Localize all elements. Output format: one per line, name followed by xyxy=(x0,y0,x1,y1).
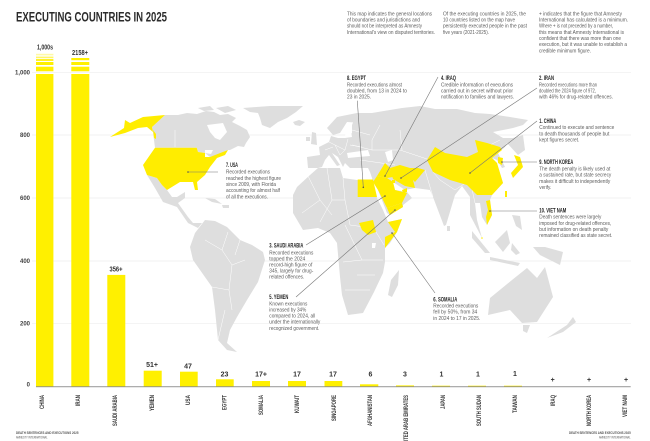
callout: Saudi Arabia: related offences. xyxy=(269,275,304,281)
callout: Viet Nam: but information on death penalty xyxy=(539,227,609,233)
text block: plus sign explanation: execution, but it was unable to establish a xyxy=(539,42,627,48)
callout: Iraq xyxy=(441,76,514,101)
source: left footer: AMNESTY INTERNATIONAL xyxy=(16,436,48,440)
country: South Sudan xyxy=(359,220,376,235)
callout: Iraq: carried out in secret without prior xyxy=(441,88,513,94)
value labels: 47 xyxy=(184,364,192,370)
arrow: Iraq xyxy=(384,77,438,177)
callout: Iran: 2. IRAN xyxy=(539,76,554,82)
callout: Yemen: compared to 2024, all xyxy=(269,314,315,320)
country: Iran xyxy=(390,165,415,188)
country labels: SAUDI ARABIA xyxy=(113,395,119,426)
country: Saudi Arabia xyxy=(373,176,407,208)
callout: North Korea: a sustained rate, but state secrecy xyxy=(539,173,612,179)
country labels: USA xyxy=(186,394,192,405)
arrow: Iran xyxy=(400,88,537,179)
bar: USA xyxy=(180,372,198,386)
source: left footer: DEATH SENTENCES AND EXECUTIONS 2025 xyxy=(16,431,78,435)
y axis labels xyxy=(15,71,31,388)
y axis labels: 400 xyxy=(20,259,31,265)
country: Afghanistan xyxy=(407,168,425,182)
callout: Viet Nam: remained classified as state secret. xyxy=(539,233,612,239)
arrow: China xyxy=(469,121,537,174)
country: USA xyxy=(110,115,228,190)
text block: map disclaimer: This map indicates the general locations xyxy=(347,11,432,17)
borders xyxy=(175,125,500,340)
land: Africa xyxy=(293,168,402,315)
text block: map disclaimer: should not be interpreted as Amnesty xyxy=(347,24,422,30)
source: right footer: AMNESTY INTERNATIONAL xyxy=(599,436,630,440)
bar: Egypt xyxy=(216,379,234,386)
callout: USA: of all the executions. xyxy=(226,194,268,200)
value labels: 356+ xyxy=(110,266,122,274)
callout: Saudi Arabia: 3. SAUDI ARABIA xyxy=(269,243,304,249)
callout: Iraq: notification to families and lawyers. xyxy=(441,95,514,101)
value labels: 17 xyxy=(329,372,337,378)
bar: United Arab Emirates xyxy=(396,385,414,386)
bar: Somalia xyxy=(252,381,270,386)
country labels: JAPAN xyxy=(441,395,447,409)
land: islands xyxy=(198,106,576,338)
country labels: KUWAIT xyxy=(295,395,301,413)
callout: USA: 7. USA xyxy=(226,163,238,169)
text block: map disclaimer: International's view on disputed territories. xyxy=(347,30,435,36)
callout: Yemen: Known executions xyxy=(269,302,308,308)
callout: Egypt xyxy=(347,76,407,101)
text block: plus sign explanation: confident that there was more than one xyxy=(539,36,621,42)
callout: North Korea: makes it difficult to independently xyxy=(539,179,611,185)
callout: Saudi Arabia xyxy=(269,243,314,281)
callout: North Korea: 9. NORTH KOREA xyxy=(539,160,574,166)
baseline xyxy=(36,385,631,388)
text block: plus sign explanation xyxy=(539,11,628,54)
callout: USA: reached the highest figure xyxy=(226,176,281,182)
value labels: + xyxy=(551,377,555,384)
countries: Kuwait, UAE and Singapore xyxy=(392,180,483,239)
y axis labels: 200 xyxy=(20,322,31,328)
bar: Iran xyxy=(71,58,89,386)
value labels: 17+ xyxy=(255,372,267,378)
land: Greenland xyxy=(243,106,303,128)
callout: Viet Nam: 10. VIET NAM xyxy=(539,208,566,214)
country labels: CHINA xyxy=(40,395,46,409)
country labels: TAIWAN xyxy=(513,395,519,413)
country labels: IRAQ xyxy=(551,395,557,406)
bar: Singapore xyxy=(324,381,342,386)
text block: executing countries note: persistently executed people in the past xyxy=(443,24,528,30)
callout: Iraq: 4. IRAQ xyxy=(441,76,456,82)
country labels: NORTH KOREA xyxy=(587,395,593,426)
bar: Japan xyxy=(432,385,450,388)
callout: Egypt: Recorded executions almost xyxy=(347,82,402,88)
callout: Iran: Recorded executions more than xyxy=(539,82,597,88)
country: China xyxy=(427,140,503,195)
bar: Saudi Arabia xyxy=(107,275,125,386)
country labels: SINGAPORE xyxy=(332,395,338,421)
arrow: North Korea xyxy=(501,161,537,163)
text block: map disclaimer xyxy=(347,11,435,36)
callout: China: Continued to execute and sentence xyxy=(539,125,614,131)
value labels: 6 xyxy=(369,372,373,378)
callout: Egypt: 8. EGYPT xyxy=(347,76,366,82)
callout: Egypt: doubled, from 13 in 2024 to xyxy=(347,88,407,94)
country labels: IRAN xyxy=(76,395,82,406)
country: Iraq xyxy=(377,163,393,178)
y axis labels: 800 xyxy=(20,133,31,139)
text block: executing countries note: 10 countries listed on the map have xyxy=(443,18,515,24)
text block: plus sign explanation: this means that Amnesty International is xyxy=(539,30,624,36)
value labels: 23 xyxy=(221,372,228,378)
callout: China: to death thousands of people but xyxy=(539,131,610,137)
source: right footer: DEATH SENTENCES AND EXECUTIONS 2025 xyxy=(569,431,631,435)
country labels: EGYPT xyxy=(222,395,228,410)
callout: Saudi Arabia: topped the 2024 xyxy=(269,256,305,262)
value labels: + xyxy=(624,377,628,384)
bar: Afghanistan xyxy=(360,384,378,386)
source: left footer xyxy=(16,431,78,440)
country: Taiwan xyxy=(505,191,507,197)
country: North Korea xyxy=(498,157,503,165)
arrow: Somalia xyxy=(391,232,435,293)
arrow: Saudi Arabia xyxy=(306,195,386,245)
value labels: 1 xyxy=(440,372,444,378)
callout: USA xyxy=(226,163,281,200)
callout: Yemen: 5. YEMEN xyxy=(269,295,288,301)
country: Viet Nam xyxy=(486,200,492,225)
source: right footer xyxy=(569,431,631,440)
country: Japan xyxy=(511,155,523,178)
value labels: 3 xyxy=(403,372,407,378)
text block: plus sign explanation: International has calculated is a minimum. xyxy=(539,18,628,24)
value labels xyxy=(37,44,628,384)
country: Somalia xyxy=(385,219,402,248)
callout: Saudi Arabia: record-high figure of xyxy=(269,262,313,268)
value labels: 1,000s xyxy=(37,44,53,52)
callout: Egypt: 23 in 2025. xyxy=(347,95,371,101)
bar: Kuwait xyxy=(288,381,306,386)
land: Eurasia xyxy=(307,106,528,238)
callout: Yemen xyxy=(269,295,321,332)
arrow: Viet Nam xyxy=(489,210,537,212)
value labels: 1 xyxy=(476,372,480,378)
callout: Saudi Arabia: Recorded executions xyxy=(269,250,314,256)
callout: North Korea xyxy=(539,160,612,191)
callout: Iran xyxy=(539,76,613,101)
bar: Yemen xyxy=(144,371,162,386)
title: EXECUTING COUNTRIES IN 2025 xyxy=(16,10,167,24)
arrow: Egypt xyxy=(357,101,364,188)
world map xyxy=(110,106,576,352)
land: Mexico and Central America xyxy=(147,175,202,228)
callout: North Korea: The death penalty is likely used at xyxy=(539,166,611,172)
bar: Taiwan xyxy=(504,385,522,388)
country labels: VIET NAM xyxy=(623,395,629,417)
bar: China xyxy=(36,54,53,387)
text block: executing countries note: five years (2021-2025). xyxy=(443,30,489,36)
callout: China: 1. CHINA xyxy=(539,119,557,125)
text block: executing countries note: Of the executing countries in 2025, the xyxy=(443,11,526,17)
country labels: AFGHANISTAN xyxy=(368,395,374,426)
callout: USA: Recorded executions xyxy=(226,170,270,176)
country labels: SOMALIA xyxy=(259,395,265,415)
callout: Yemen: under the internationally xyxy=(269,320,321,326)
inland seas and lakes xyxy=(205,123,393,248)
country labels: YEMEN xyxy=(150,395,156,411)
country: Egypt xyxy=(358,180,377,197)
callout: Yemen: recognized government. xyxy=(269,326,319,332)
callout: Somalia: fell by 50%, from 34 xyxy=(433,310,477,316)
callout: Yemen: increased by 34% xyxy=(269,308,307,314)
callout: Saudi Arabia: 345, largely for drug- xyxy=(269,268,314,274)
land: Scandinavia xyxy=(327,113,362,135)
value labels: + xyxy=(587,377,591,384)
text block: map disclaimer: of boundaries and jurisdictions and xyxy=(347,18,420,24)
y axis labels: 1,000 xyxy=(15,71,31,77)
callout: Somalia xyxy=(433,297,480,322)
callout: China xyxy=(539,119,614,143)
y axis labels: 600 xyxy=(20,196,31,202)
arrow: USA xyxy=(187,171,218,173)
callout: North Korea: verify. xyxy=(539,185,551,191)
land: South America xyxy=(190,220,265,352)
callout: Viet Nam: Death sentences were largely xyxy=(539,215,602,221)
callout: Viet Nam xyxy=(539,208,612,239)
value labels: 51+ xyxy=(146,362,158,369)
callout: USA: since 2009, with Florida xyxy=(226,182,276,188)
callout: Somalia: 6. SOMALIA xyxy=(433,297,458,303)
callout: Iraq: Credible information of executions xyxy=(441,82,513,88)
callout: Iran: with 46% for drug-related offences. xyxy=(539,95,613,101)
callout: Somalia: Recorded executions xyxy=(433,304,479,310)
land: Canada xyxy=(152,111,250,157)
country labels xyxy=(40,394,629,441)
y axis labels: 0 xyxy=(27,382,31,388)
text block: plus sign explanation: Where + is not preceded by a number, xyxy=(539,24,613,30)
text block: plus sign explanation: credible minimum figure. xyxy=(539,48,591,54)
callout: USA: accounting for almost half xyxy=(226,188,280,194)
text block: plus sign explanation: + indicates that the figure that Amnesty xyxy=(539,11,622,17)
callout: Iran: doubled the 2024 figure of 972, xyxy=(539,88,596,94)
country: Yemen xyxy=(387,203,403,215)
callout: China: kept figures secret. xyxy=(539,137,579,143)
leader lines xyxy=(187,77,537,297)
value labels: 2158+ xyxy=(72,50,88,57)
value labels: 17 xyxy=(293,372,301,378)
value labels: 1 xyxy=(513,371,517,378)
arrow: Yemen xyxy=(296,209,396,297)
bar: South Sudan xyxy=(468,385,486,388)
text block: executing countries note xyxy=(443,11,528,36)
callout: Viet Nam: imposed for drug-related offences, xyxy=(539,221,611,227)
callout: Somalia: in 2024 to 17 in 2025. xyxy=(433,316,480,322)
country labels: SOUTH SUDAN xyxy=(477,395,483,426)
